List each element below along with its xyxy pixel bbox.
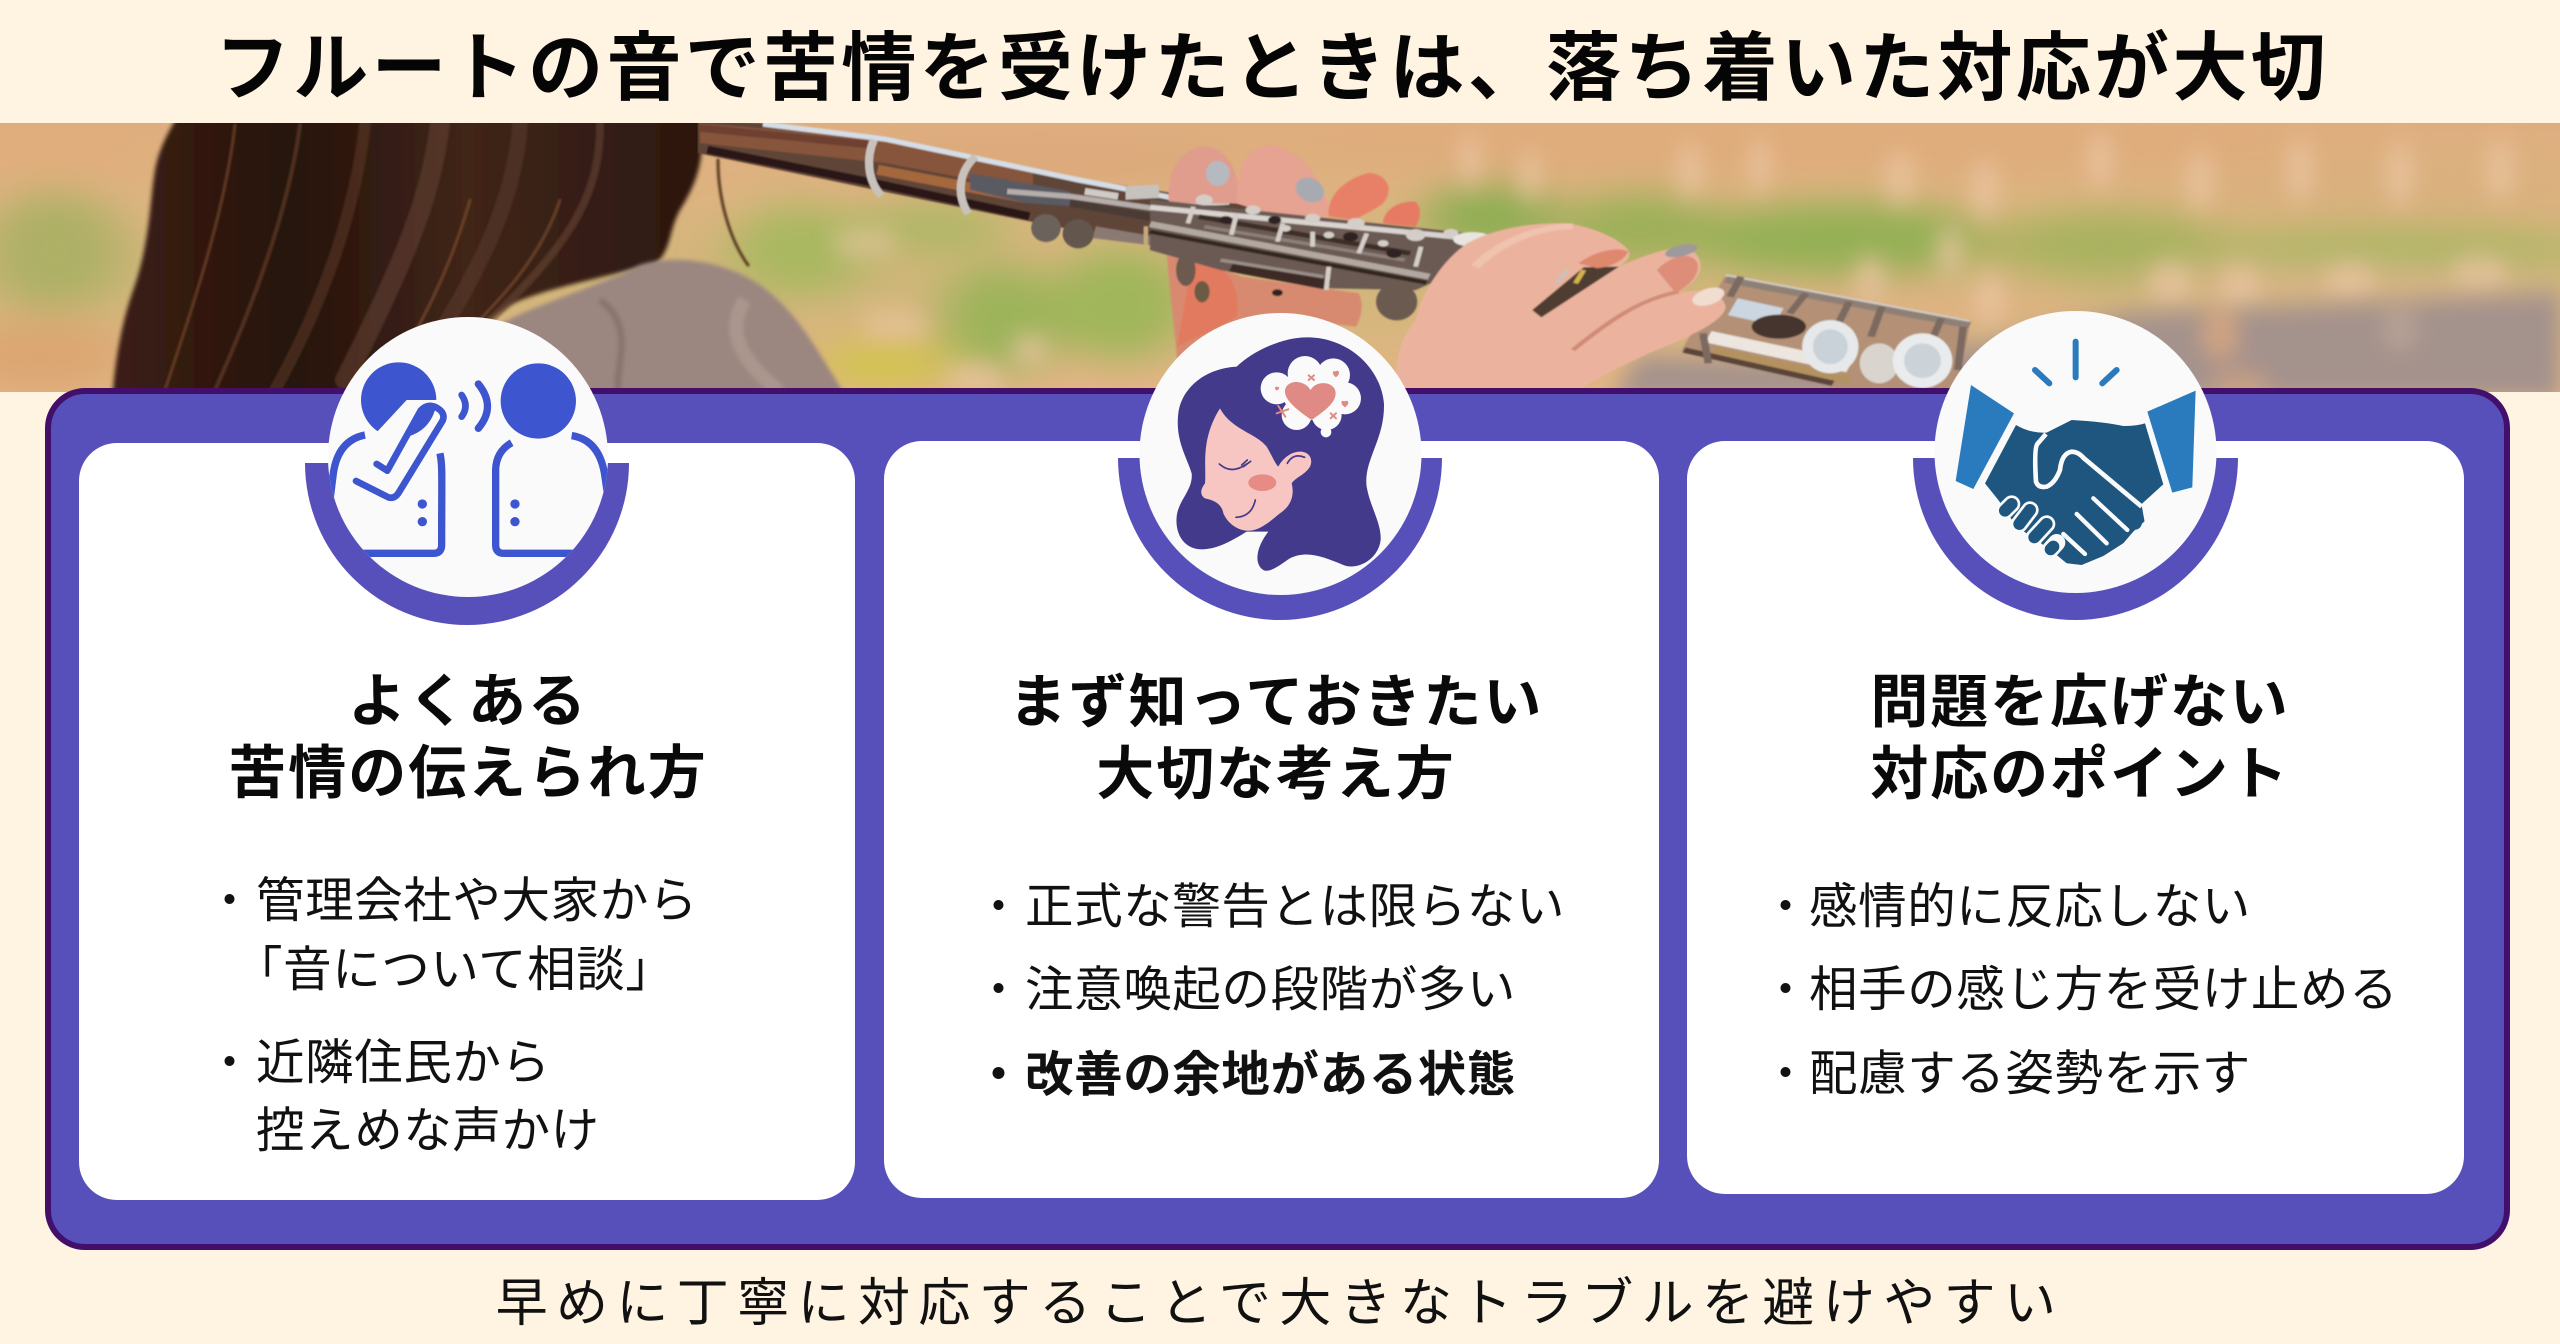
bullet list: card 1: ・ <box>206 874 253 927</box>
main purple panel <box>45 388 2510 1250</box>
heading: card 2: まず知っておきたい <box>1009 670 1543 735</box>
bullet list: card 2 <box>975 880 1565 1102</box>
icon: two people whispering <box>305 317 629 625</box>
bullet list: card 1: 控えめな声かけ <box>256 1104 600 1158</box>
bullet list: card 1: 管理会社や大家から <box>256 874 698 928</box>
background foliage <box>0 120 2560 396</box>
bullet list: card 3 <box>1762 880 2398 1101</box>
bullet list: card 1: 「音について相談」 <box>234 943 674 997</box>
photo: flute player in autumn park <box>0 123 2560 392</box>
title: フルートの音で苦情を受けたときは、落ち着いた対応が大切 <box>215 26 2329 110</box>
heading: card 2: 大切な考え方 <box>1096 742 1456 807</box>
hands and keys of flute <box>1150 146 1970 390</box>
panel: mindset <box>884 441 1659 1198</box>
key stack <box>1150 199 1486 290</box>
heading: card 1 <box>228 669 708 806</box>
foot joint <box>1681 277 1970 388</box>
lower palm <box>1166 247 1362 360</box>
bullet list: card 3: 感情的に反応しない <box>1809 880 2251 934</box>
heading: card 2 <box>1009 670 1543 807</box>
bullet list: card 2: ・ <box>975 963 1022 1016</box>
heading: card 1: 苦情の伝えられ方 <box>228 741 708 806</box>
bullet list: card 3: 相手の感じ方を受け止める <box>1809 963 2398 1017</box>
heading: card 3 <box>1870 670 2290 807</box>
bullet list: card 2: ・ <box>975 880 1022 933</box>
bullet list: card 2: 改善の余地がある状態 <box>1025 1048 1516 1102</box>
panel: complaints <box>79 443 855 1200</box>
bullet list: card 3: 配慮する姿勢を示す <box>1809 1047 2251 1101</box>
right hand <box>1396 223 1726 390</box>
bullet list: card 1: 近隣住民から <box>256 1036 551 1090</box>
upper fingers <box>1169 147 1239 203</box>
bullet list: card 1: ・ <box>206 1036 253 1089</box>
footer message: 早めに丁寧に対応することで大きなトラブルを避けやすい <box>496 1275 2064 1333</box>
bullet list: card 2: 正式な警告とは限らない <box>1025 880 1565 934</box>
bullet list: card 3: ・ <box>1762 963 1809 1016</box>
bullet list: card 3: ・ <box>1762 1047 1809 1100</box>
panel: response points <box>1687 441 2464 1194</box>
bullet list: card 2: ・ <box>975 1048 1022 1101</box>
heading: card 1: よくある <box>348 669 588 734</box>
bullet list: card 2: 注意喚起の段階が多い <box>1025 963 1516 1017</box>
hair <box>112 115 748 400</box>
bullet list: card 3: ・ <box>1762 880 1809 933</box>
head joint of flute <box>698 120 1280 256</box>
bullet list: card 1 <box>206 874 698 1158</box>
road <box>1610 292 2560 400</box>
heading: card 3: 対応のポイント <box>1870 742 2290 807</box>
sweater <box>478 260 848 400</box>
heading: card 3: 問題を広げない <box>1870 670 2290 735</box>
